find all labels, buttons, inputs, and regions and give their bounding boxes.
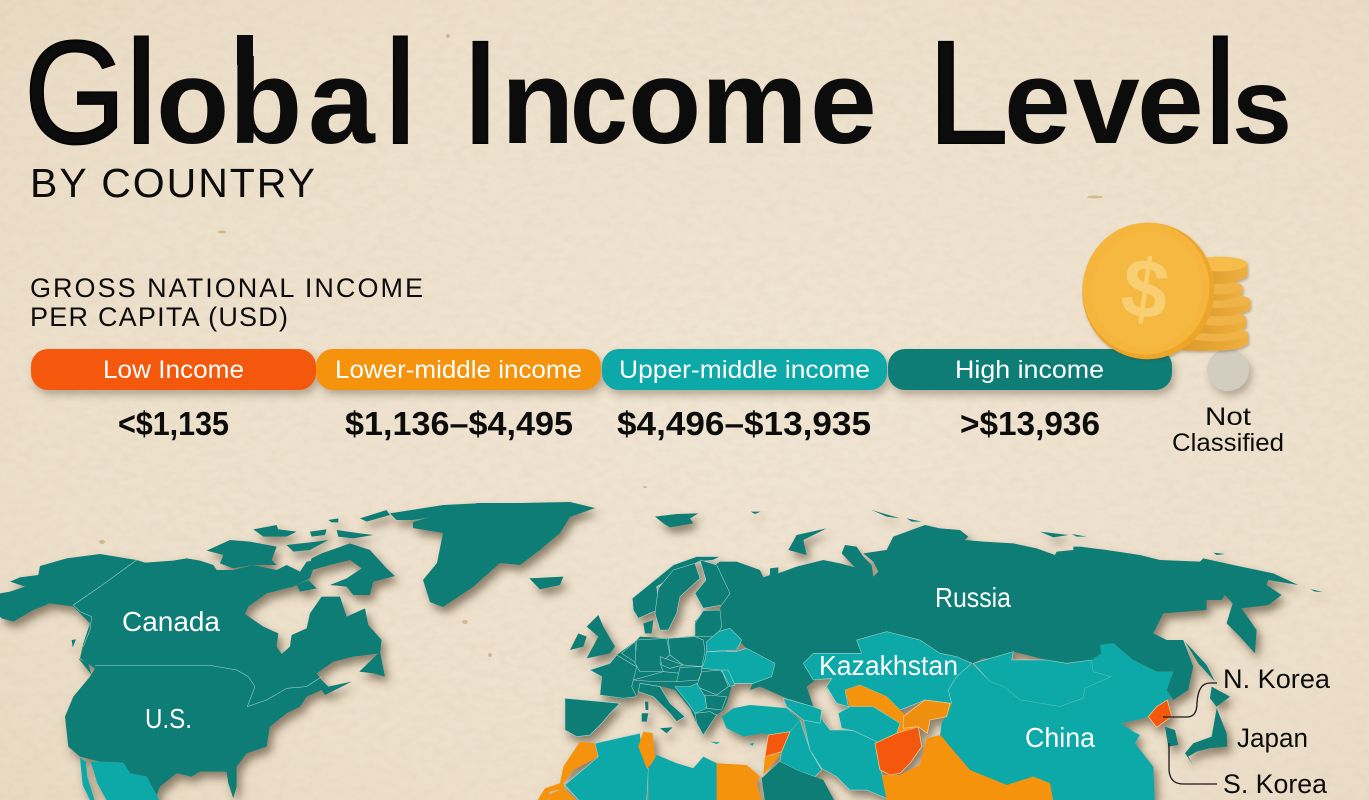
- legend bar: lower-middle income: [316, 349, 601, 390]
- region: North America: [0, 503, 477, 800]
- map label: Kazakhstan: Kazakhstan: [819, 650, 958, 681]
- country: Mongolia: [973, 652, 1112, 707]
- country: Saudi Arabia: [762, 762, 835, 800]
- legend bar: high income: [888, 349, 1172, 390]
- legend scale: [31, 349, 1284, 457]
- country: Syria: [765, 732, 790, 757]
- country: Turkmenistan: [838, 707, 900, 743]
- value: lower-middle income: $1,136–$4,495: [345, 405, 573, 442]
- legend heading: PER CAPITA (USD): [30, 302, 288, 332]
- country: Iceland: [529, 577, 563, 589]
- island: Corsica: [645, 702, 648, 710]
- map label: U.S.: U.S.: [145, 703, 192, 734]
- region: Benelux: [622, 642, 637, 663]
- map label: N. Korea: N. Korea: [1223, 664, 1331, 694]
- map label: China: China: [1025, 722, 1095, 753]
- country: Denmark: [643, 620, 653, 633]
- Cyprus and Crete: [710, 742, 754, 746]
- Svalbard: [655, 513, 698, 527]
- region: Caucasus: [783, 698, 822, 723]
- country: Libya: [648, 755, 717, 800]
- country: Iraq: [780, 720, 822, 777]
- country: Jordan: [763, 753, 782, 775]
- country: Ireland: [570, 633, 587, 650]
- title: n: [501, 35, 574, 169]
- country: Belarus: [707, 628, 742, 652]
- country: Mexico: [91, 762, 160, 800]
- legend bar: low income: [31, 349, 316, 390]
- region: Kyrgyzstan and Tajikistan: [903, 700, 950, 733]
- Newfoundland: [359, 652, 385, 677]
- country: Greece: [695, 712, 717, 735]
- Vancouver Island: [78, 658, 92, 675]
- country: Turkey: [722, 705, 800, 737]
- title: l: [1204, 11, 1237, 175]
- country: United Kingdom: [587, 615, 615, 658]
- country: Ukraine: [702, 648, 775, 683]
- legend swatch: not classified: [1207, 349, 1249, 391]
- title: I: [460, 11, 501, 175]
- country: Iran: [803, 717, 890, 798]
- country: Russia: [715, 525, 1298, 707]
- value: upper-middle income: $4,496–$13,935: [617, 405, 871, 442]
- country: Tunisia: [638, 732, 655, 768]
- icon: gold coins: [1071, 212, 1250, 370]
- title: m: [701, 35, 808, 169]
- country: Bulgaria: [705, 695, 727, 710]
- legend label: lower-middle income: Lower-middle income: [335, 356, 582, 384]
- world map: [0, 502, 1323, 800]
- landmass: continental Europe: [590, 609, 753, 735]
- island: Sicily: [660, 727, 673, 733]
- title: e: [810, 35, 877, 169]
- legend label: low income: Low Income: [103, 356, 244, 384]
- country: Uzbekistan and Central Asia: [845, 685, 952, 733]
- legend label: not classified: [1172, 403, 1284, 457]
- legend bar: upper-middle income: [602, 349, 887, 390]
- borders: Canada and US: [73, 560, 322, 707]
- country: Czechia: [660, 657, 683, 668]
- leader line: N. Korea: [1163, 683, 1217, 717]
- country: South Korea: [1165, 727, 1178, 747]
- title: L: [927, 11, 1009, 175]
- country: Morocco: [537, 742, 598, 800]
- island: Sakhalin: [1185, 642, 1215, 682]
- country: Poland: [668, 637, 705, 667]
- country: Italy: [638, 683, 685, 722]
- map label: Canada: Canada: [122, 606, 220, 637]
- title: e: [1137, 35, 1204, 169]
- map label: Japan: Japan: [1237, 723, 1308, 753]
- region: Far East: [1040, 532, 1323, 765]
- region: Baltics: [695, 610, 722, 637]
- Franz Josef Land: [751, 510, 922, 522]
- title: b: [229, 35, 302, 169]
- country: Germany: [635, 638, 670, 672]
- region: Eurasia and North Africa: [529, 510, 1298, 800]
- title: s: [1232, 45, 1292, 166]
- country: North Korea: [1148, 700, 1172, 727]
- region: South Asia: [882, 735, 1053, 800]
- title: l: [125, 11, 158, 175]
- country: Algeria: [565, 733, 648, 800]
- country: Sweden: [655, 563, 700, 630]
- title: G: [24, 11, 126, 175]
- title: [24, 11, 1292, 175]
- title: l: [384, 11, 417, 175]
- legend heading: [30, 273, 423, 332]
- country: Moldova: [722, 670, 735, 687]
- country: Japan: [1185, 687, 1230, 765]
- legend heading: GROSS NATIONAL INCOME: [30, 273, 423, 303]
- country: Afghanistan: [875, 727, 922, 775]
- country: Hungary and Slovakia: [677, 667, 702, 682]
- country: Mauritania: [548, 788, 578, 800]
- region: Western Balkans: [675, 683, 707, 713]
- leader line: S. Korea: [1169, 743, 1217, 784]
- country: China: [940, 643, 1173, 800]
- country: Austria and Switzerland: [633, 672, 680, 682]
- country: Finland: [695, 560, 730, 608]
- Arctic islands, far east: [1040, 532, 1323, 592]
- country: Norway: [632, 557, 720, 618]
- legend label: high income: High income: [955, 356, 1104, 384]
- country: Canada and United States: [0, 554, 382, 798]
- country: Spain and Portugal: [565, 698, 620, 737]
- legend label: not classified: Not: [1205, 403, 1251, 431]
- map label: Russia: Russia: [935, 582, 1011, 613]
- country: Egypt: [717, 763, 762, 800]
- title: o: [628, 35, 701, 169]
- Arctic islands: [207, 503, 477, 595]
- region: Greenland: [413, 502, 595, 607]
- country: Romania: [697, 670, 728, 695]
- island: Sardinia: [642, 713, 648, 722]
- map label: S. Korea: S. Korea: [1223, 769, 1328, 799]
- legend label: not classified: Classified: [1172, 429, 1284, 457]
- title: e: [1004, 35, 1071, 169]
- country: Kazakhstan: [803, 632, 972, 710]
- legend label: upper-middle income: Upper-middle income: [619, 356, 870, 384]
- subtitle: BY COUNTRY: [30, 160, 315, 206]
- peninsula: Baja California: [80, 758, 95, 800]
- icon: gold coins: $: [1116, 240, 1175, 338]
- title: a: [308, 35, 376, 169]
- country: France: [590, 655, 637, 698]
- value: low income: <$1,135: [118, 405, 229, 442]
- Novaya Zemlya: [788, 528, 827, 555]
- title: c: [570, 35, 628, 169]
- Alaska panhandle islands: [72, 639, 76, 647]
- value: high income: >$13,936: [960, 405, 1100, 442]
- title: v: [1073, 35, 1140, 169]
- title: o: [156, 35, 229, 169]
